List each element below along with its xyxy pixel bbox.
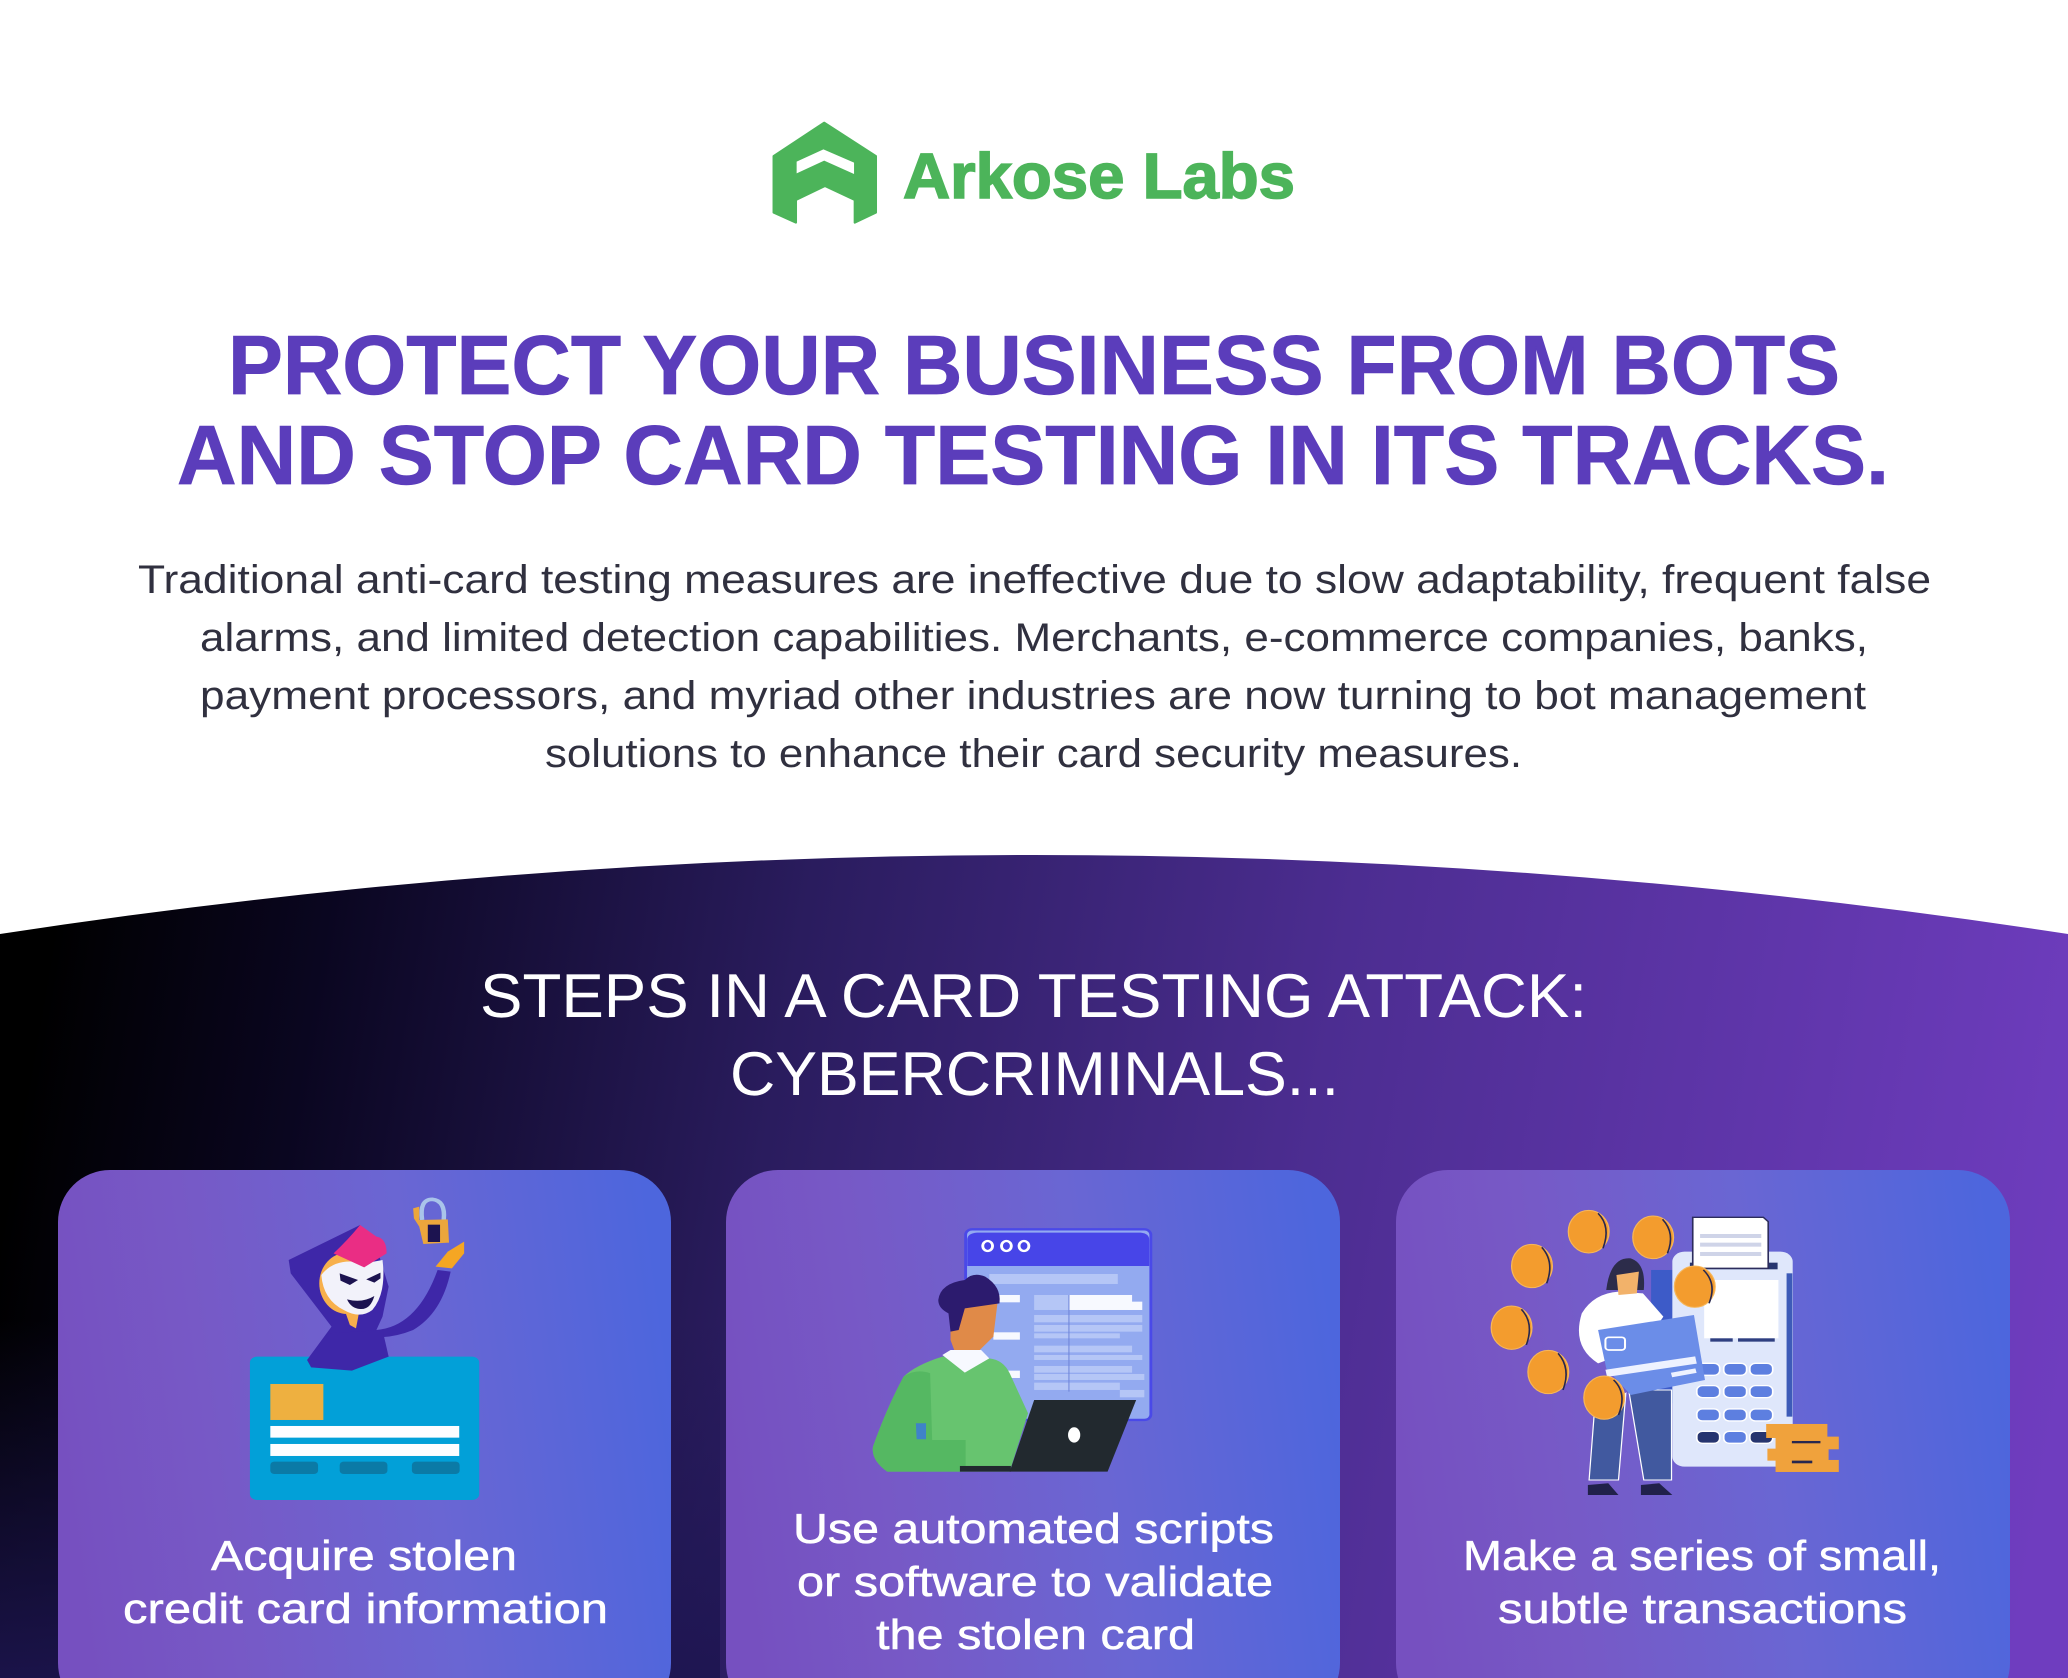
intro text block: alarms, and limited detection capabilities. Merchants, e-commerce companies, banks, <box>200 616 1868 660</box>
intro text block: payment processors, and myriad other industries are now turning to bot management <box>200 674 1866 718</box>
step 1 label: credit card information <box>123 1585 608 1632</box>
panel: step 1 acquire <box>58 1170 671 1678</box>
card background 2 <box>726 1170 1340 1678</box>
step 1 label: Acquire stolen <box>211 1532 517 1579</box>
step 2 label: the stolen card <box>876 1611 1195 1658</box>
step 3 label <box>1463 1532 1941 1632</box>
title: AND STOP CARD TESTING IN ITS TRACKS. <box>177 408 1889 502</box>
icon: person with laptop and browser window <box>873 1229 1151 1472</box>
panel: step 2 validate <box>726 1170 1340 1678</box>
step 2 label: or software to validate <box>797 1558 1273 1605</box>
card background 1 <box>58 1170 671 1678</box>
icon: person with card, payment terminal and coins <box>1491 1210 1839 1495</box>
panel: dark gradient background with curved top <box>0 855 2068 1678</box>
heading: steps: STEPS IN A CARD TESTING ATTACK: <box>480 962 1587 1031</box>
step 1 label <box>123 1532 608 1632</box>
intro text block <box>138 558 1931 776</box>
logo wordmark: Arkose Labs <box>903 140 1295 212</box>
logo: Arkose Labs <box>774 123 1295 223</box>
step 3 label: subtle transactions <box>1498 1585 1907 1632</box>
step 2 label <box>793 1505 1274 1658</box>
panel: step 3 transactions <box>1396 1170 2010 1678</box>
step 3 label: Make a series of small, <box>1463 1532 1941 1579</box>
icon: logo mark <box>774 123 876 223</box>
heading: steps <box>480 962 1587 1109</box>
intro text block: solutions to enhance their card security measures. <box>545 732 1522 776</box>
step 2 label: Use automated scripts <box>793 1505 1274 1552</box>
heading: steps: CYBERCRIMINALS... <box>730 1040 1339 1109</box>
title <box>177 318 1889 502</box>
intro text block: Traditional anti-card testing measures are ineffective due to slow adaptability, frequent false <box>138 558 1931 602</box>
title: PROTECT YOUR BUSINESS FROM BOTS <box>228 318 1840 412</box>
card background 3 <box>1396 1170 2010 1678</box>
icon: hacker with stolen credit card <box>250 1199 479 1500</box>
